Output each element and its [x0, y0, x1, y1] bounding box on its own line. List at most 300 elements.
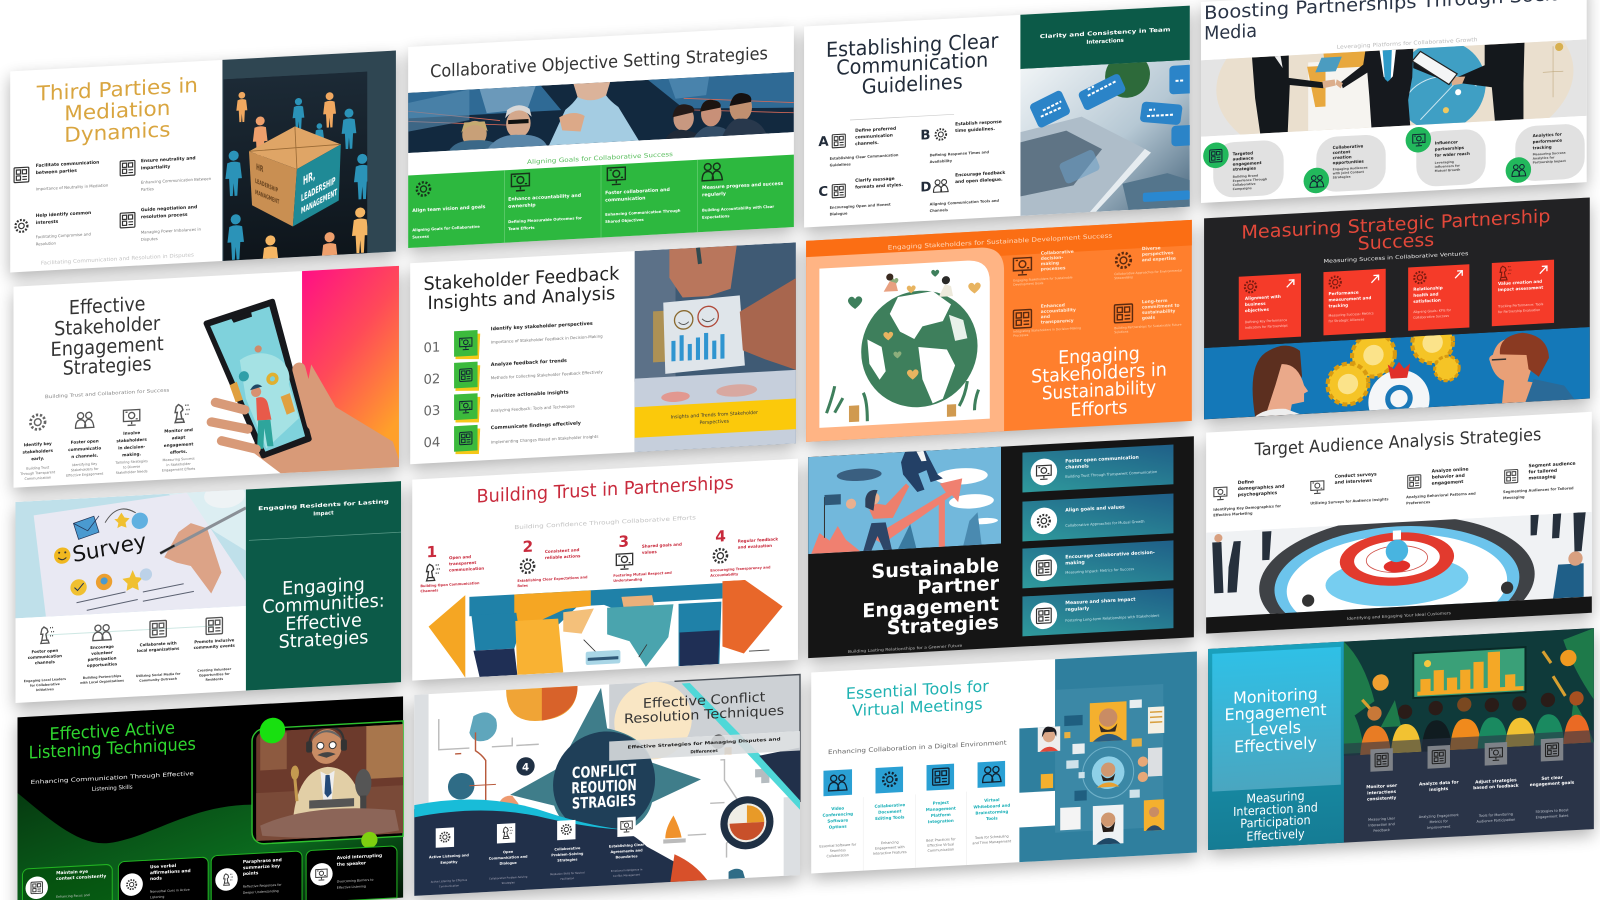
- slide: Monitoring Engagement Levels Effectively: [1208, 628, 1594, 850]
- illustration: two people and gold gears: [1204, 327, 1590, 420]
- column: involve: to Diverse: [123, 465, 140, 470]
- card: encourage decision-making: making: [1065, 559, 1085, 567]
- subtitle: Listening Skills: [92, 784, 133, 793]
- column: identify: Communication: [24, 476, 51, 481]
- column: collaborative problem-solving: Problem-Solving: [551, 852, 584, 857]
- slide: Engaging Stakeholders in Sustainability Efforts: [806, 220, 1192, 442]
- item: collaborative decision-making: Engaging Stakeholders for Sustainable: [1013, 275, 1073, 283]
- item: long-term commitment: goals: [1142, 315, 1156, 321]
- item 04: Communicate findings effectively: [491, 420, 581, 431]
- banner: [635, 398, 796, 438]
- step 1: Building Open Communication: [420, 581, 480, 588]
- tool: document editing: Collaborative: [874, 802, 905, 809]
- item 02: Methods for Collecting Stakeholder Feedback Effectively: [491, 369, 603, 380]
- step 3: Fostering Mutual Respect and: [613, 571, 672, 578]
- tool: project management: Management: [926, 805, 956, 812]
- column: enhance accountability: Defining Measurable Outcomes for: [508, 216, 582, 224]
- item: guide negotiation: Disputes: [141, 236, 158, 242]
- tool: project management: [926, 764, 956, 853]
- title: Engagement: [1224, 700, 1327, 725]
- column: set goals: Engagement Rates: [1536, 814, 1569, 819]
- tool: whiteboard: Brainstorming: [975, 809, 1008, 816]
- header panel: [1020, 6, 1190, 70]
- column: open communication: Strategies: [502, 881, 515, 885]
- item: analyze online behavior: Analyzing Behavioral Patterns and: [1406, 491, 1476, 499]
- card: relationship: [1408, 264, 1469, 331]
- item: analyze online behavior: [1406, 466, 1476, 505]
- tool: whiteboard: Tools: [986, 815, 998, 821]
- column: measure progress: [702, 160, 783, 220]
- footer subtitle: Facilitating Communication and Resolution in Disputes: [41, 252, 194, 267]
- item: collaborative decision-making: making: [1041, 260, 1059, 267]
- slide: Target Audience Analysis Strategies: [1206, 412, 1592, 657]
- card: alignment: business: [1245, 301, 1266, 307]
- card: avoid interrupting: Overcoming Barriers to: [337, 878, 374, 884]
- step 3: values: [642, 549, 657, 555]
- item: conduct surveys: Utilizing Surveys for Audience Insights: [1310, 497, 1388, 506]
- illustration: climbing an arrow together: [808, 446, 1001, 554]
- card: measure and share impact: Measure and share impact: [1065, 596, 1136, 606]
- column: involve: Stakeholder Needs: [116, 469, 148, 475]
- step 4: Accountability: [710, 572, 739, 578]
- footer text: Identifying and Engaging Your Ideal Customers: [1347, 610, 1451, 621]
- item: analyze online behavior: Analyze online: [1432, 466, 1469, 475]
- card: targeted audience: Campaigns: [1233, 186, 1252, 191]
- subtitle: Measuring Success in Collaborative Ventures: [1323, 251, 1469, 265]
- green band: [408, 155, 794, 248]
- card: value creation: impact assessment: [1498, 285, 1543, 292]
- column: foster collaboration: [605, 164, 681, 224]
- photo: leadership cube with figures: LEADERSHIP: [301, 175, 336, 205]
- title: Dynamics: [64, 117, 170, 147]
- illustration: conflict map with star: 4: [522, 762, 529, 774]
- column: identify: Building Trust: [26, 465, 50, 471]
- item 02: 02: [423, 372, 440, 388]
- card: value creation: Tracking Performance: Tools: [1497, 302, 1544, 309]
- tool: whiteboard: Virtual: [984, 797, 1000, 803]
- cyan curves and dark base: [414, 677, 800, 896]
- item 03: Prioritize actionable insights: [491, 389, 569, 400]
- slide: Engaging Communities: Effective Strategies: [15, 474, 401, 703]
- card: targeted audience: strategies: [1233, 165, 1257, 172]
- green accent dots: [260, 712, 378, 854]
- title: Guidelines: [862, 69, 963, 99]
- item: define demographics: Define: [1238, 479, 1254, 486]
- subtitle: Leveraging Platforms for Collaborative Growth: [1337, 37, 1478, 51]
- title: Communication: [836, 47, 988, 80]
- card: performance: tracking: [1329, 302, 1348, 309]
- item: diverse perspectives: perspectives: [1142, 250, 1174, 258]
- card: measure and share impact: regularly: [1065, 606, 1089, 613]
- item: diverse perspectives: [1114, 244, 1182, 280]
- item D: [920, 170, 1005, 214]
- item 01: 01: [423, 340, 440, 356]
- subtitle: Building Confidence Through Collaborative Efforts: [514, 514, 696, 531]
- column: set goals: Set clear: [1541, 775, 1564, 781]
- star heading: REOUTION: [571, 776, 637, 798]
- column: enhance accountability: Team Efforts: [508, 226, 535, 231]
- column: set goals: Strategies to Boost: [1535, 808, 1569, 814]
- column: establishing agreements: Agreements and: [610, 848, 643, 854]
- column: identify: [19, 414, 56, 481]
- title: Media: [1204, 20, 1257, 45]
- tool: document editing: Editing Tools: [875, 814, 905, 821]
- item B: B: [920, 128, 931, 144]
- item A: [818, 125, 899, 168]
- item: define demographics: Effective Marketing: [1213, 511, 1253, 517]
- title: Measuring Strategic Partnership: [1241, 206, 1550, 244]
- item: long-term commitment: commitment to: [1142, 303, 1180, 311]
- column: align vision: Align team vision and goals: [412, 204, 486, 214]
- card: avoid interrupting: Avoid interrupting: [337, 853, 382, 861]
- card: avoid interrupting: Effective Listening: [337, 884, 366, 890]
- tool: document editing: Enhancing: [881, 840, 899, 845]
- title: Strategies: [279, 627, 368, 653]
- item: ensure neutrality: Ensure neutrality and: [141, 155, 196, 164]
- column: adjust strategies: Tools for Monitoring: [1478, 812, 1513, 818]
- item 01: [423, 320, 603, 362]
- step 4: Encouraging Transparency and: [710, 565, 771, 573]
- card: analytics: Analytics for: [1533, 131, 1562, 138]
- card: influencer partnerships: for wider reach: [1435, 151, 1470, 158]
- column: foster: communicatio: [68, 445, 101, 452]
- step 3: [613, 529, 682, 583]
- card: relationship: satisfaction: [1413, 297, 1441, 304]
- title: Effective: [285, 610, 362, 635]
- item: analyze online behavior: Preferences: [1406, 500, 1430, 505]
- column: enhance accountability: [508, 170, 582, 231]
- column: collaborate: local organizations: [137, 646, 180, 653]
- tool: document editing: Interactive Features: [873, 850, 907, 856]
- title: Resolution Techniques: [624, 703, 784, 727]
- column: monitor: [162, 404, 196, 473]
- column: encourage: Building Partnerships: [83, 674, 121, 680]
- column: monitor user interactions: [1366, 748, 1398, 833]
- tool: video conferencing: Collaboration: [827, 853, 849, 858]
- step 2: reliable actions: [545, 553, 581, 560]
- step 1: [420, 540, 484, 593]
- item 04: 04: [423, 435, 440, 451]
- column: foster: Stakeholders for: [71, 467, 99, 472]
- item B: Establish response: [955, 119, 1002, 128]
- column: foster collaboration: Foster collaboration and: [605, 187, 670, 196]
- card: analytics: Measuring Success: [1533, 151, 1566, 157]
- step 3: Understanding: [613, 577, 643, 583]
- card: analytics: [1506, 123, 1585, 183]
- tool: video conferencing: [819, 769, 857, 859]
- photo frame with clay character: [252, 721, 403, 844]
- item C: Dialogue: [830, 211, 848, 216]
- item A: Define preferred: [855, 126, 896, 134]
- column: adjust strategies: based on feedback: [1473, 783, 1519, 790]
- title: Stakeholder: [54, 312, 160, 341]
- tool: project management: Platform: [931, 812, 951, 818]
- column: align vision: Aligning Goals for Collaborative: [412, 225, 480, 232]
- item: diverse perspectives: Stewardship: [1114, 275, 1133, 280]
- column: foster: [24, 626, 66, 693]
- panel heading: Impact: [313, 510, 334, 518]
- item 01: Identify key stakeholder perspectives: [491, 321, 593, 332]
- tool: whiteboard: [972, 761, 1012, 845]
- item D: D: [920, 180, 932, 196]
- card: collaborative content: Engaging Audiences: [1333, 165, 1368, 171]
- card: verbal affirmations: [118, 857, 208, 900]
- column: set goals: [1530, 737, 1575, 820]
- tool: project management: Project: [933, 800, 949, 806]
- illustration: globe with hearts: [819, 259, 990, 428]
- card: targeted audience: engagement: [1233, 160, 1262, 167]
- card: maintain eye contact: Enhancing Focus and: [56, 893, 90, 899]
- item: facilitate communication: between parties: [36, 168, 77, 176]
- item A: communication: [855, 132, 893, 141]
- column: foster: channels: [35, 659, 56, 665]
- card: analytics: Partnership Impact: [1533, 159, 1566, 165]
- column: identify: early.: [31, 455, 45, 461]
- column: collaborative problem-solving: Collaborative: [554, 846, 581, 852]
- item: enhanced accountability: transparency: [1041, 318, 1074, 326]
- step 4: 4: [715, 527, 726, 546]
- step 2: Consistent and: [545, 547, 580, 554]
- subtitle: Participation: [1240, 813, 1311, 831]
- item: identify common interests: [15, 210, 92, 248]
- column: foster: Effective Engagement: [66, 472, 104, 478]
- subtitle band: Effective Strategies for Managing Disputes and: [628, 736, 781, 750]
- item: collaborative decision-making: Development Goals: [1013, 281, 1044, 287]
- card: relationship: health and: [1413, 291, 1439, 298]
- column: establishing agreements: Emotional Intelligence in: [611, 868, 643, 873]
- title: Engaging: [1058, 343, 1140, 369]
- step 3: 3: [618, 532, 629, 551]
- column: monitor user interactions: consistently: [1367, 795, 1397, 802]
- column: open communication: Collaborative Problem-Solving: [489, 875, 528, 881]
- card: influencer partnerships: [1406, 123, 1486, 188]
- item 02: [423, 355, 603, 394]
- photo: leadership cube with figures: LEADERSHIP: [255, 177, 279, 195]
- photo: hand with smiley feedback card: [634, 242, 796, 452]
- title: Effective Active: [49, 718, 175, 745]
- column: promote: Opportunities for: [199, 672, 230, 677]
- column: promote: community events: [194, 643, 236, 650]
- item 01: Importance of Stakeholder Feedback in Decision-Making: [491, 333, 603, 345]
- footer band: [1206, 596, 1592, 634]
- item: conduct surveys: and interviews: [1335, 478, 1372, 486]
- step 2: 2: [522, 537, 533, 556]
- card: analytics: tracking: [1533, 144, 1552, 150]
- banner text: Perspectives: [699, 418, 730, 426]
- card: alignment: objectives: [1245, 307, 1270, 313]
- tool: video conferencing: Options: [829, 824, 847, 830]
- card: paraphrase: [211, 851, 302, 900]
- card: measure and share impact: [1022, 588, 1173, 636]
- photo: leadership cube with figures: HR: [256, 162, 264, 177]
- header text: Interactions: [1086, 37, 1124, 46]
- column: foster: Engaging Local Leaders: [24, 677, 66, 683]
- column: monitor: Monitor and: [164, 427, 193, 434]
- item 03: 03: [423, 403, 440, 420]
- item: identify common interests: Help identify common: [36, 210, 91, 219]
- subtitle: Enhancing Collaboration in a Digital Environment: [828, 739, 1007, 756]
- card: influencer partnerships: Influencer: [1435, 139, 1458, 145]
- column: enhance accountability: ownership: [508, 202, 536, 210]
- banner text: Insights and Trends from Stakeholder: [671, 410, 758, 421]
- photo: target with crowd: [1206, 512, 1592, 617]
- card: alignment: [1239, 273, 1301, 340]
- tool: document editing: [873, 766, 907, 856]
- dotted line behind icons: [45, 626, 213, 635]
- item: segment audience: Messaging: [1503, 495, 1525, 500]
- column: open communication: Dialogue: [500, 861, 517, 866]
- card: performance: [1323, 269, 1386, 335]
- item B: Defining Response Times and: [930, 150, 990, 157]
- item: diverse perspectives: Diverse: [1142, 245, 1161, 252]
- column: foster: Foster open: [32, 648, 58, 654]
- footer text: Building Lasting Relationships for a Greener Future: [848, 643, 963, 654]
- tool: project management: Communication: [928, 847, 954, 853]
- item C: formats and styles.: [855, 182, 903, 191]
- column: analyze data: Metrics for: [1430, 819, 1449, 824]
- column: collaborate: Community Outreach: [139, 677, 177, 683]
- step 1: communication: [449, 565, 484, 572]
- item: long-term commitment: sustainability: [1142, 308, 1176, 316]
- card: alignment: Alignment with: [1245, 294, 1281, 301]
- column: analyze data: Improvement: [1427, 825, 1451, 830]
- item: identify common interests: interests: [36, 219, 59, 226]
- card: value creation: for Partnership Evaluation: [1498, 308, 1540, 314]
- item: collaborative decision-making: processes: [1041, 266, 1066, 273]
- column: active listening: Empathy: [440, 860, 458, 865]
- column: promote: Residents: [205, 677, 223, 682]
- item: analyze online behavior: engagement: [1432, 479, 1463, 487]
- column: foster collaboration: Shared Objectives: [605, 218, 645, 224]
- title: Virtual Meetings: [852, 695, 983, 720]
- item: ensure neutrality: Parties: [141, 186, 154, 192]
- step 1: transparent: [449, 560, 476, 566]
- card: influencer partnerships: Influencers for: [1435, 163, 1460, 169]
- card: performance: measurement and: [1329, 295, 1371, 302]
- column: analyze data: Analyzing Engagement: [1419, 813, 1459, 819]
- item 03: [423, 388, 575, 425]
- item 03: Analyzing Feedback: Tools and Techniques: [491, 403, 575, 413]
- item: segment audience: messaging: [1529, 474, 1556, 481]
- illustration: figures with opposing arrows: [428, 580, 783, 678]
- title: Efforts: [1070, 397, 1128, 421]
- slide: Boosting Partnerships Through Social Media: [1201, 0, 1587, 203]
- panel heading: Engaging Residents for Lasting: [258, 499, 389, 512]
- card: value creation: [1492, 260, 1554, 326]
- column: analyze data: insights: [1429, 786, 1449, 792]
- item: enhanced accountability: accountability: [1041, 307, 1076, 315]
- column: monitor: Measuring Success: [163, 456, 195, 462]
- card: verbal affirmations: Nonverbal Cues in Active: [150, 888, 190, 894]
- item: long-term commitment: Long-term: [1142, 298, 1168, 305]
- title: Target Audience Analysis Strategies: [1254, 425, 1541, 461]
- card: avoid interrupting: the speaker: [337, 860, 367, 868]
- card: alignment: Indicators for Partnerships: [1245, 324, 1288, 330]
- card: align goals: [1022, 493, 1173, 541]
- item: collaborative decision-making: [1013, 249, 1074, 287]
- item: diverse perspectives: Collaborative Approaches for Environmental: [1114, 268, 1182, 276]
- card: verbal affirmations: Use verbal: [150, 863, 177, 870]
- title: Success: [1358, 229, 1434, 255]
- column: collaborative problem-solving: Facilitation: [560, 877, 575, 881]
- column: involve: in decision-: [118, 444, 145, 450]
- item: facilitate communication: Importance of Neutrality in Mediation: [36, 182, 109, 191]
- card: maintain eye contact: [22, 864, 112, 900]
- column: measure progress: Building Accountability with Clear: [702, 205, 774, 213]
- card: collaborative content: [1304, 134, 1386, 194]
- item: ensure neutrality: [120, 154, 212, 193]
- card: alignment: Defining Key Performance: [1245, 318, 1287, 324]
- item C: C: [818, 184, 828, 200]
- item 04: [423, 418, 598, 457]
- item: diverse perspectives: and expertise: [1142, 255, 1176, 263]
- tool: whiteboard: and Time Management: [972, 839, 1012, 845]
- item B: [920, 119, 1002, 165]
- item D: Channels: [930, 208, 948, 213]
- column: identify: Through Transparent: [19, 470, 56, 476]
- card: relationship: Aligning Goals: KPIs for: [1413, 308, 1452, 314]
- item: ensure neutrality: impartiality: [141, 164, 170, 171]
- item: guide negotiation: Managing Power Imbalances in: [141, 226, 202, 235]
- column: foster: for Collaborative: [30, 682, 60, 688]
- green panel: [246, 481, 401, 691]
- column: involve: making.: [122, 451, 142, 457]
- item A: Establishing Clear Communication: [830, 153, 899, 161]
- item: segment audience: Segment audience: [1529, 461, 1576, 469]
- item: collaborative decision-making: Collaborative: [1041, 249, 1074, 257]
- illustration: conflict map with star: [439, 675, 776, 873]
- tool: project management: Best Practices for: [926, 837, 956, 843]
- item: conduct surveys: [1310, 471, 1388, 506]
- column: monitor: in Stakeholder: [166, 462, 191, 467]
- column: collaborate: [136, 620, 181, 683]
- column: collaborate: Collaborate with: [140, 640, 177, 647]
- top-right panel: [609, 674, 800, 741]
- title: Effectively: [1234, 733, 1317, 757]
- column: active listening: Active Listening for Effective: [431, 879, 468, 884]
- column: measure progress: Expectations: [702, 214, 730, 220]
- title: Partner: [917, 572, 1000, 599]
- item: conduct surveys: Conduct surveys: [1335, 471, 1377, 480]
- item C: Clarify message: [855, 176, 895, 184]
- item B: time guidelines.: [955, 126, 995, 134]
- card: collaborative content: with Joint Content: [1333, 170, 1365, 176]
- item: enhanced accountability: [1013, 301, 1081, 338]
- column dividers: [863, 792, 966, 871]
- column: identify: stakeholders: [23, 448, 54, 455]
- title: Sustainable: [871, 554, 999, 583]
- column: collaborative problem-solving: Strategies: [557, 857, 577, 863]
- step 2: Establishing Clear Expectations and: [517, 575, 588, 583]
- item: guide negotiation: Guide negotiation and: [141, 204, 197, 213]
- title: Stakeholder Feedback: [423, 263, 620, 295]
- card: encourage decision-making: Measuring Impact: Metrics for Success: [1065, 567, 1134, 575]
- step 1: 1: [427, 543, 437, 561]
- column: promote: Promote inclusive: [194, 637, 235, 644]
- illustration: audience watching a chart: [1344, 628, 1594, 756]
- slide: Essential Tools for Virtual Meetings: [811, 652, 1197, 873]
- photo: team with holographic displays: [408, 72, 794, 153]
- column: align vision: Success: [412, 235, 430, 240]
- title: Monitoring: [1233, 684, 1318, 708]
- subtitle: Interaction and: [1233, 800, 1318, 819]
- card: collaborative content: Strategies: [1333, 175, 1351, 180]
- column: involve: stakeholders: [116, 437, 147, 443]
- item: identify common interests: Resolution: [36, 240, 57, 247]
- item A: A: [818, 134, 829, 150]
- peach panel: [806, 246, 1004, 442]
- slide: Building Trust in Partnerships: [412, 459, 798, 681]
